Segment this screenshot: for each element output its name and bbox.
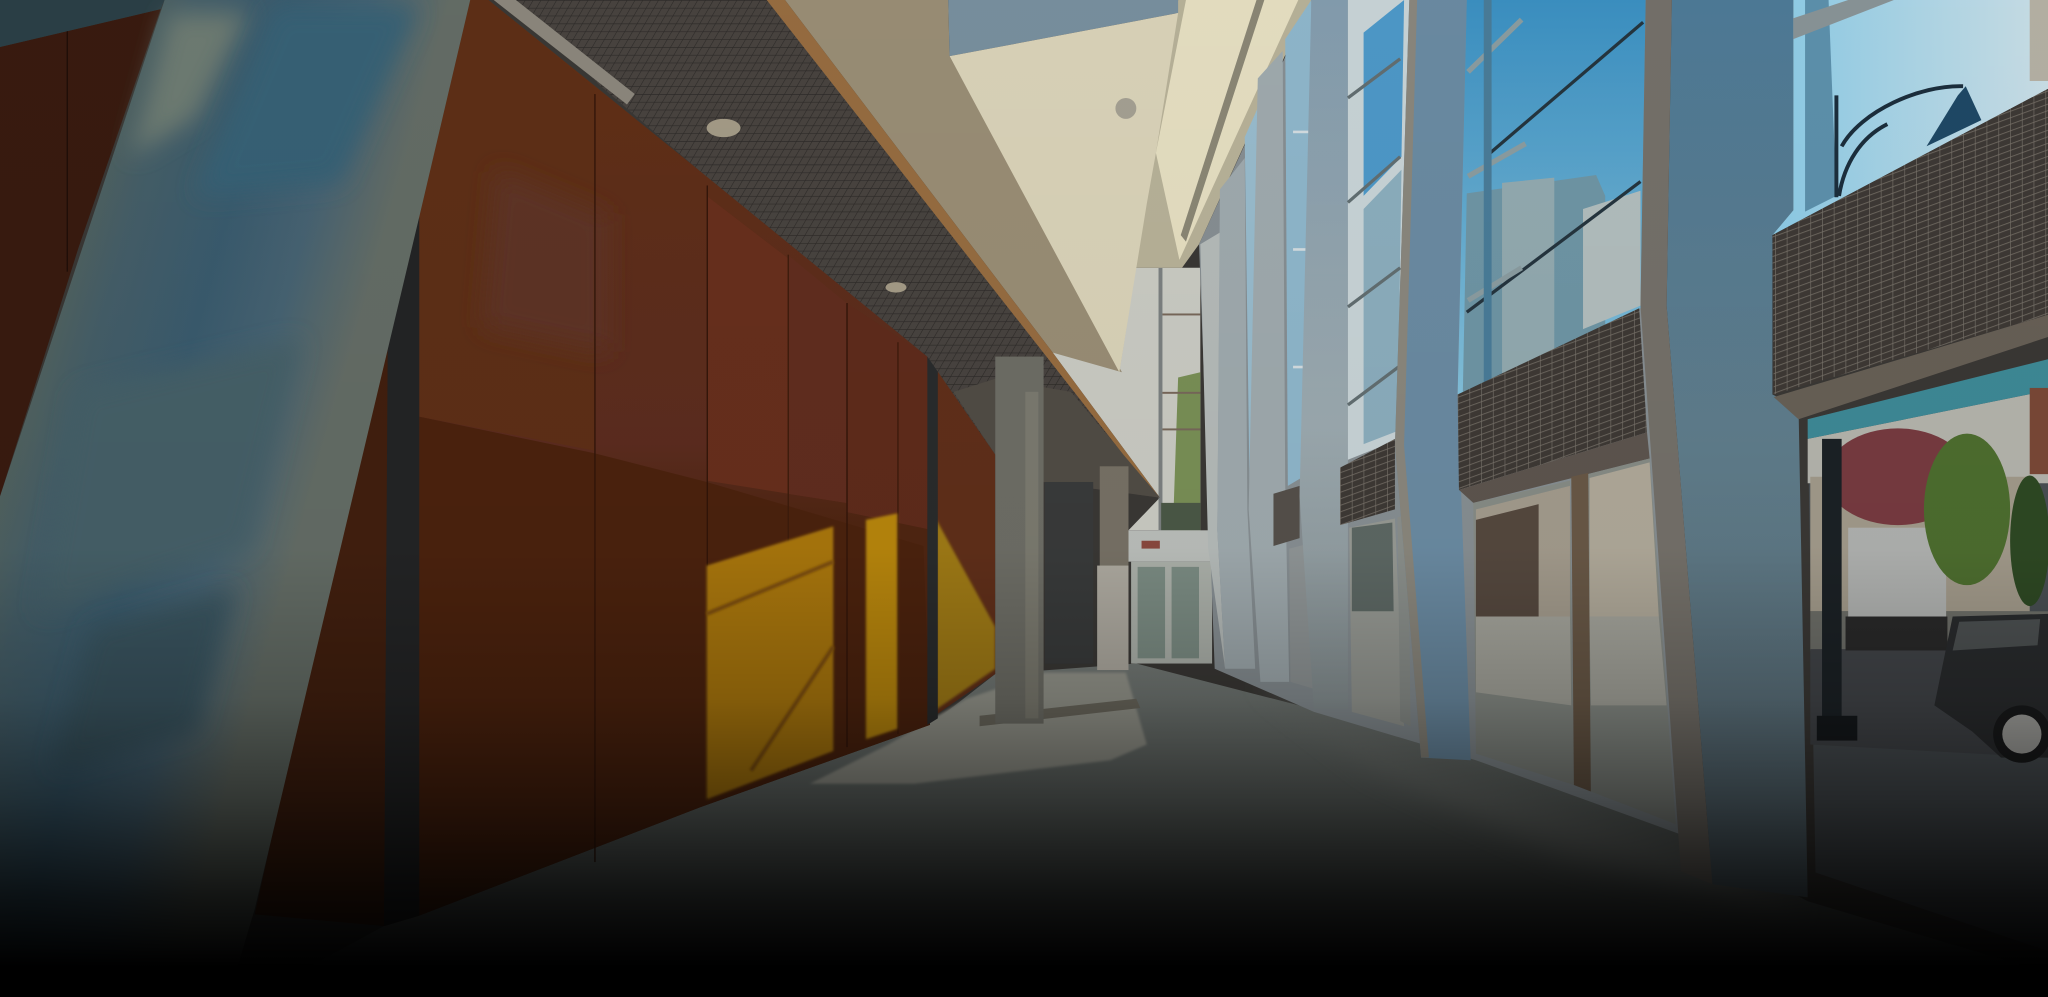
floor [255, 664, 2048, 997]
ceiling sensor [1115, 98, 1136, 119]
glass doors with street reflection [1459, 432, 1676, 824]
far entrance [1128, 530, 1217, 664]
dark stone wall [1045, 482, 1093, 664]
grille top trim [494, 0, 635, 104]
white sloped ceiling [950, 13, 1178, 372]
steel divider [927, 357, 938, 725]
concrete round columns [995, 357, 1128, 724]
tall window with sky and reflected tower [1458, 0, 1646, 394]
truck [1846, 528, 1947, 650]
sunlit patches on wood [707, 526, 833, 799]
ventilation grille right [1772, 89, 2048, 394]
vent near door [1340, 439, 1395, 525]
hanging flowers [1826, 428, 1970, 525]
door in second bay [1349, 515, 1411, 726]
ceiling light [707, 119, 741, 137]
concrete beam wall [785, 0, 1122, 372]
large leaning concrete column [0, 0, 470, 997]
distant glazing [1053, 268, 1200, 530]
trim below grille [1774, 315, 2048, 419]
large column right [1640, 0, 1808, 897]
top left ceiling band [0, 0, 165, 47]
orange beam edge [767, 0, 1160, 498]
lamp post [1817, 439, 1857, 741]
upper right window with sky and lamp [1772, 0, 2048, 235]
far left wood wall [0, 9, 161, 496]
ventilation grille middle [1458, 308, 1647, 490]
dark steel channel [384, 217, 419, 926]
ceiling grille [516, 0, 1160, 498]
wood wall: main panels [419, 0, 930, 916]
tree [1924, 434, 2010, 585]
lower right window: street reflection [1808, 359, 2048, 951]
right wall backing [1199, 0, 1685, 836]
bright corridor ceiling [1156, 0, 1298, 260]
far wood wall segment [936, 370, 995, 714]
right side far piers and glazing [1200, 0, 1314, 688]
pier D [1300, 0, 1348, 709]
large column middle right [1395, 0, 1471, 760]
ceiling backing [1119, 0, 1311, 372]
upper blue soffit [948, 0, 1178, 56]
car [1934, 614, 2048, 763]
dark wood wall beside column [255, 217, 419, 926]
second glass bay [1348, 0, 1417, 460]
